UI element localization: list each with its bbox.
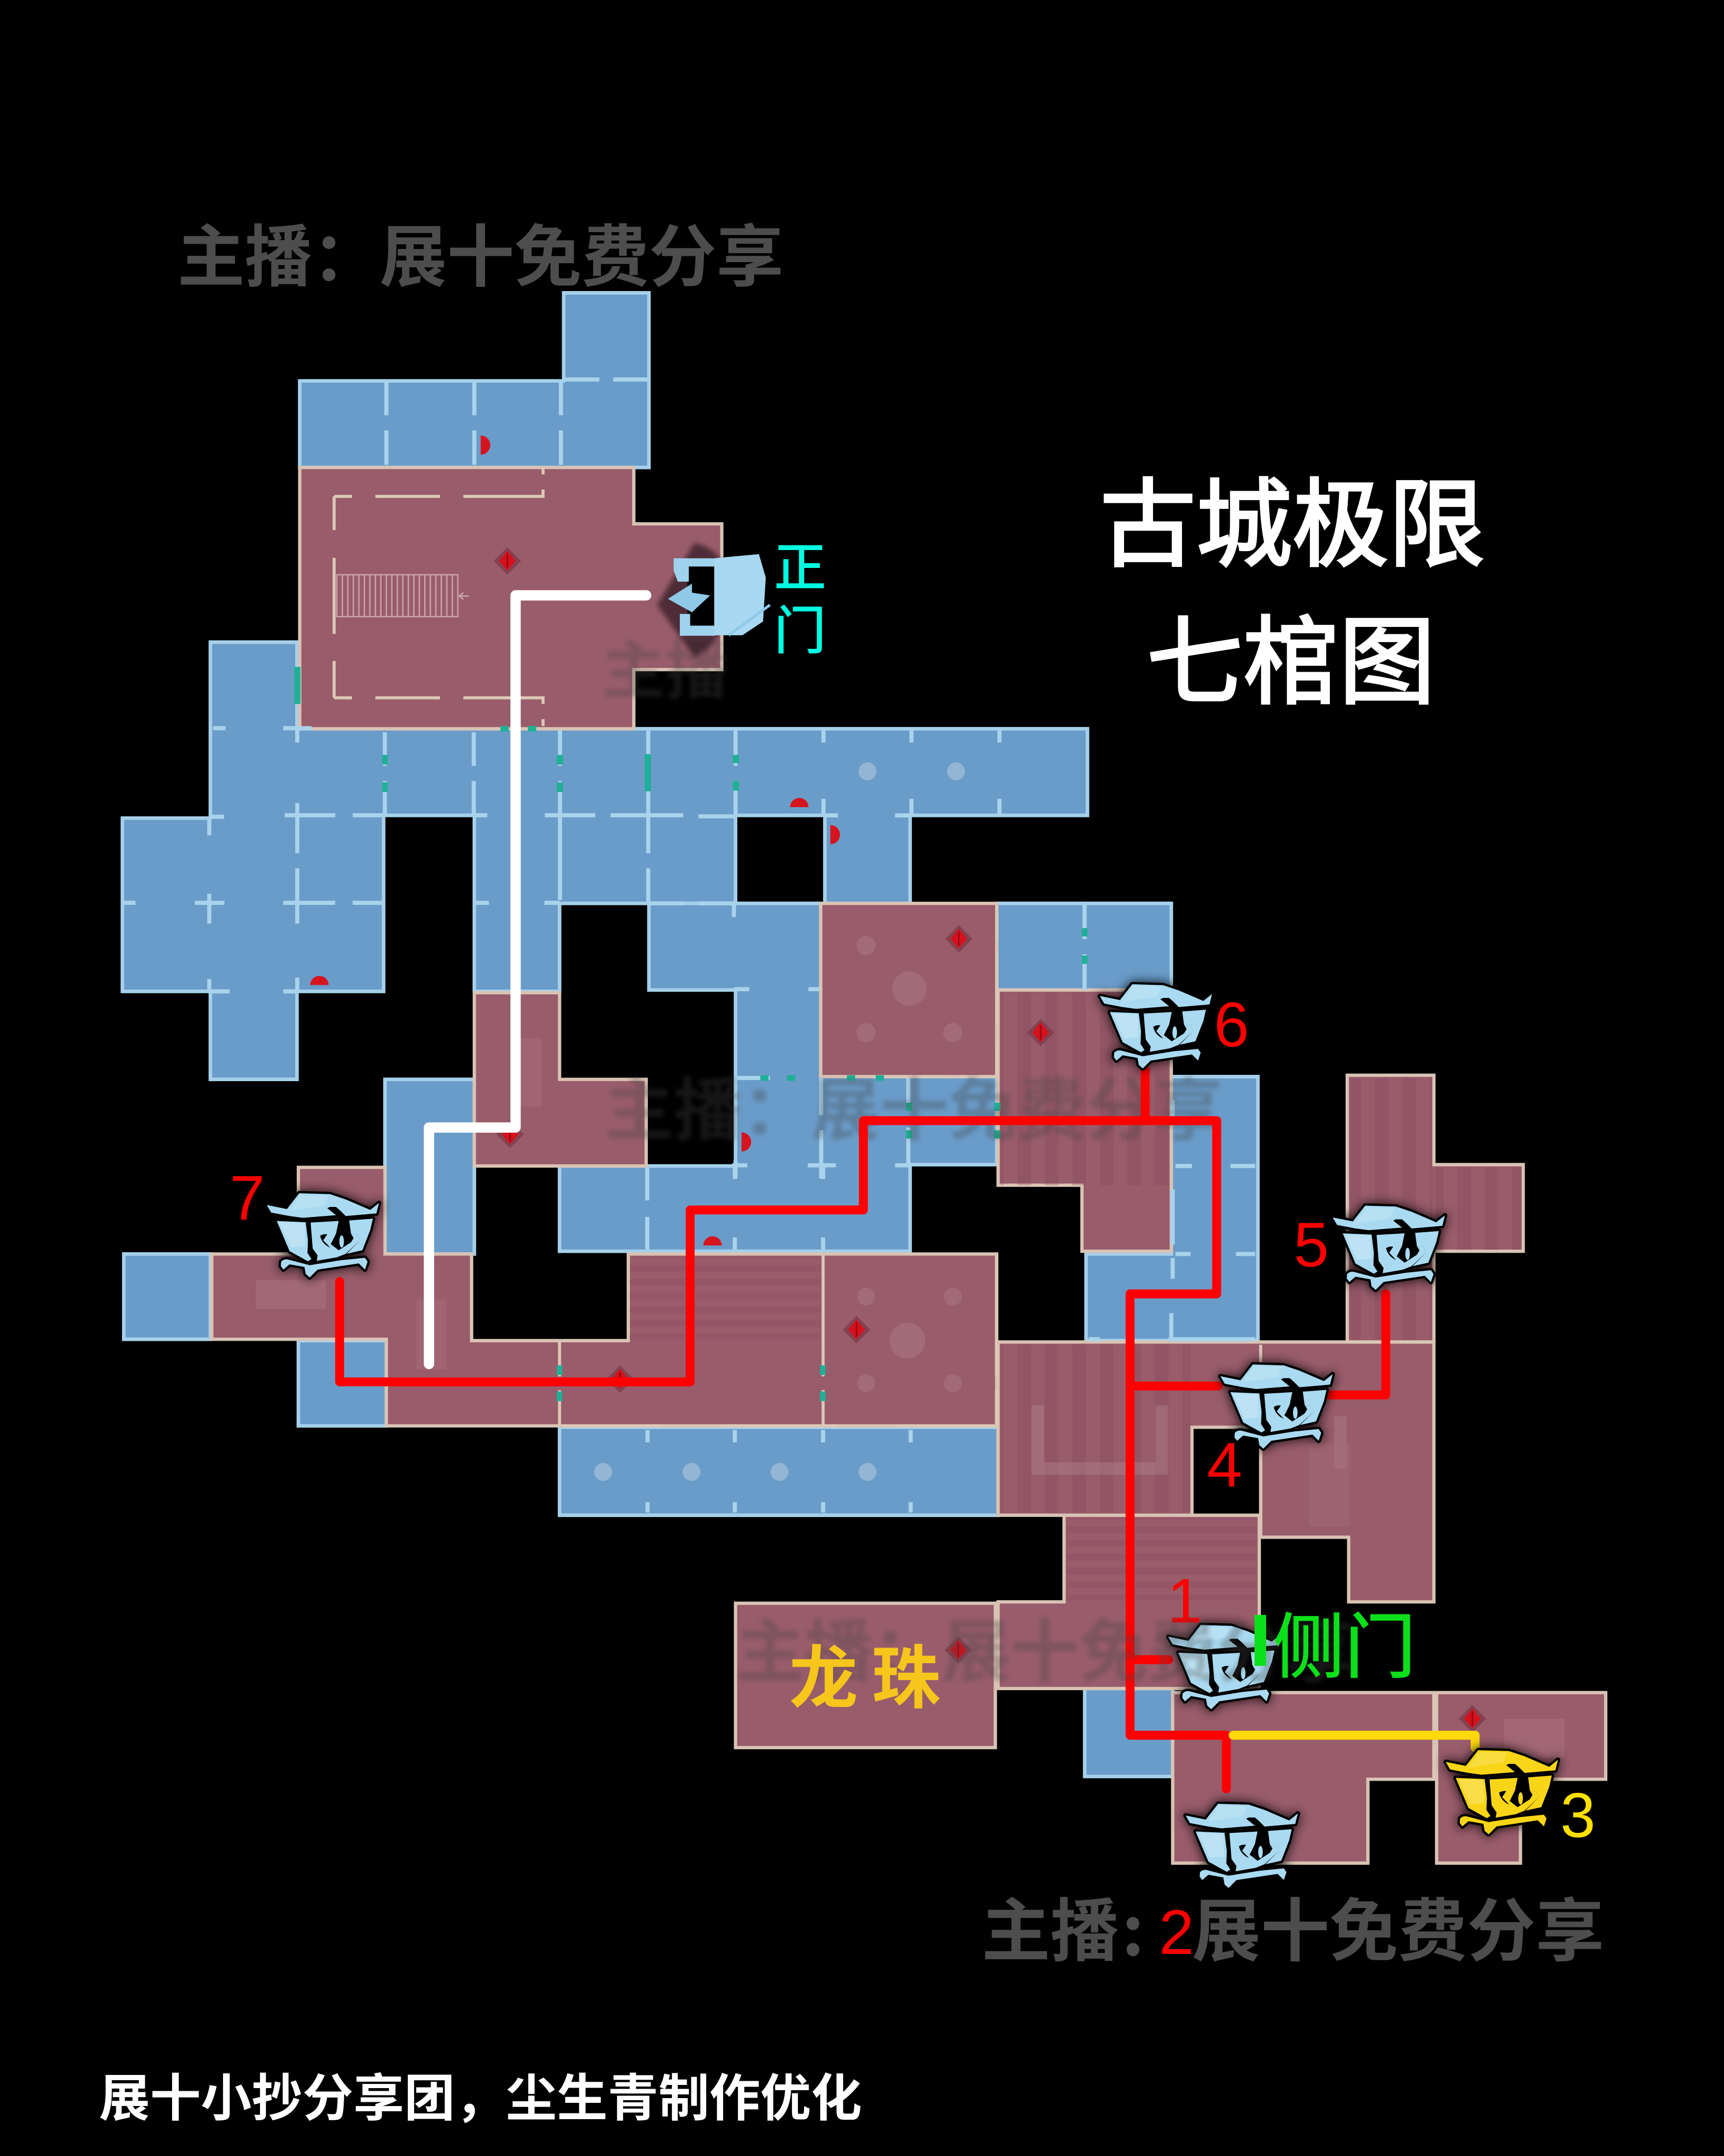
ghost watermark: middle of map: 主播：展十免费分享 xyxy=(605,1054,1224,1154)
label: side door: 侧门 xyxy=(1273,1589,1416,1693)
blue room: east passage xyxy=(1086,1076,1258,1341)
blue room: west passage xyxy=(385,1080,474,1254)
ghost watermark: entrance hall: 主播 xyxy=(602,620,729,712)
watermark: bottom: 展十免费分享 xyxy=(1192,1875,1605,1975)
footer credit: 展十小抄分享团，尘生青制作优化 xyxy=(99,2057,862,2131)
title line 1: 古城极限 xyxy=(1100,447,1485,586)
number 7: 7 xyxy=(229,1163,265,1233)
blue room: side door annex xyxy=(1085,1689,1172,1776)
panel: dungeon map xyxy=(122,293,1606,1863)
red room: west L-shaped xyxy=(474,993,646,1166)
icon: coffin 6 xyxy=(1100,984,1212,1069)
red room: south coffin room xyxy=(1172,1693,1434,1863)
entrance hall staircase xyxy=(337,575,469,617)
red room: side door hall xyxy=(998,1515,1259,1689)
title line 2: 七棺图 xyxy=(1147,584,1435,724)
route: yellow path to coffin 3 xyxy=(1233,1735,1475,1748)
red room: dragon pearl room xyxy=(736,1603,995,1748)
watermark: bottom: 主播 xyxy=(981,1875,1119,1975)
route: white path from main gate xyxy=(429,595,646,1364)
route: red branch to coffin 4 xyxy=(1130,1384,1218,1388)
blue room: far west xyxy=(124,1254,211,1339)
icon: coffin 2 xyxy=(1186,1804,1298,1888)
number 6: 6 xyxy=(1214,990,1249,1060)
blue room: upper corridor and west cluster xyxy=(123,642,1087,1080)
red room: south-west long hall xyxy=(212,1167,997,1426)
icon: coffin 1 xyxy=(1168,1625,1280,1709)
number 2: 2 xyxy=(1159,1897,1194,1968)
label: dragon pearl: 龙珠 xyxy=(789,1622,954,1722)
icon: side door marker xyxy=(1255,1615,1266,1666)
route: red branch to coffin 6 xyxy=(1144,1070,1147,1121)
blue room: south hall xyxy=(559,1428,998,1515)
interior walls of red rooms xyxy=(334,467,1434,1778)
route: red branch coffin 4 to coffin 5 xyxy=(1328,1294,1386,1395)
number 3: 3 xyxy=(1560,1780,1596,1851)
label: main gate: 正 xyxy=(774,525,826,601)
blue room: north-east small xyxy=(997,903,1171,990)
watermark: top: 展十免费分享 xyxy=(379,203,784,300)
icon: coffin 7 xyxy=(267,1193,379,1277)
ghost watermark: side door hall: 主播：展十免费分享 xyxy=(736,1596,1354,1696)
number 1: 1 xyxy=(1167,1565,1202,1636)
faint circles in blue rooms xyxy=(594,762,965,1481)
red room: east great hall xyxy=(998,1342,1434,1602)
watermark: top: 主播： xyxy=(177,203,379,300)
red room: entrance hall xyxy=(300,467,722,728)
interior walls of blue rooms xyxy=(122,380,1255,1512)
watermark: bottom: : xyxy=(1122,1875,1144,1975)
red room: north-east hall xyxy=(998,990,1171,1251)
red room: east cross xyxy=(1347,1075,1523,1342)
route: red branch to coffin 1 xyxy=(1130,1658,1169,1661)
red half-circle markers xyxy=(310,435,840,1245)
icon: coffin 3 (yellow) xyxy=(1446,1750,1558,1834)
blue room: central corridor xyxy=(559,903,997,1251)
red diamond markers xyxy=(494,547,1486,1732)
number 4: 4 xyxy=(1207,1430,1242,1500)
number 5: 5 xyxy=(1294,1210,1329,1280)
title xyxy=(1100,447,1485,724)
red room: central square xyxy=(821,903,997,1076)
teal door markers xyxy=(294,667,1087,1401)
icon: coffin 5 xyxy=(1332,1205,1445,1290)
label: main gate: 门 xyxy=(774,588,826,664)
blue room: south-west small xyxy=(298,1341,386,1426)
icon: coffin 4 xyxy=(1220,1364,1332,1449)
icon: main gate xyxy=(657,543,770,657)
blue room: top wing xyxy=(300,293,649,467)
red room: south-east coffin room xyxy=(1437,1693,1606,1863)
shading in red rooms xyxy=(256,936,1565,1757)
route: red path through coffins xyxy=(339,1121,1226,1789)
